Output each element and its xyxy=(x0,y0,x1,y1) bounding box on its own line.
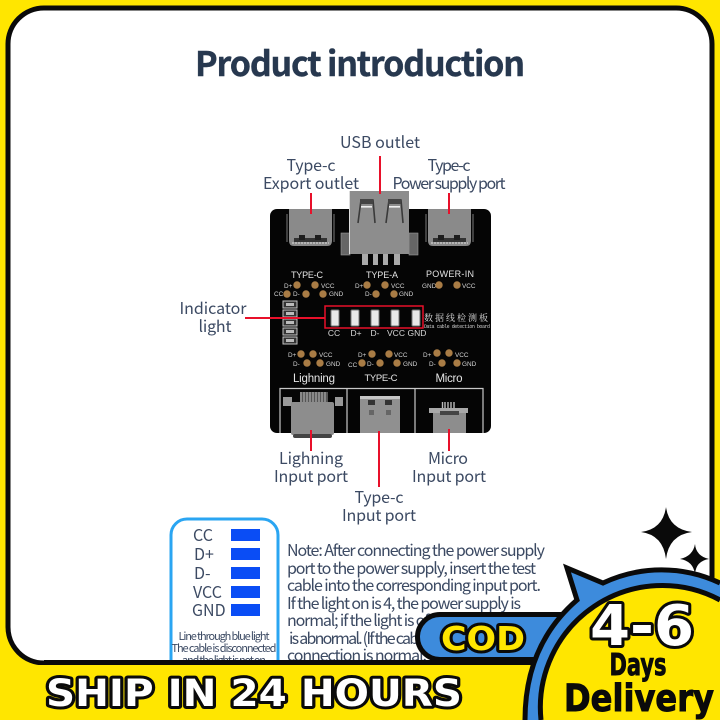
yellow strip beside badge xyxy=(712,585,720,720)
board labels bottom pads: GND xyxy=(462,361,477,368)
board labels bottom pads: D- xyxy=(367,361,374,368)
indicator LEDs: GND xyxy=(408,328,426,338)
board labels bottom: Micro xyxy=(436,373,462,385)
board labels bottom: TYPE-C xyxy=(364,373,398,384)
board labels bottom pads: GND xyxy=(326,361,341,368)
board labels top: GND xyxy=(329,291,344,298)
port: type-c input xyxy=(360,396,400,433)
legend labels xyxy=(192,522,226,621)
badge ring outline xyxy=(525,568,720,720)
legend caption: and the light is not on xyxy=(182,652,266,668)
legend labels: GND xyxy=(192,597,226,621)
icon: sparkles xyxy=(641,507,709,574)
board labels bottom xyxy=(293,373,462,385)
board labels bottom pads: GND xyxy=(403,361,418,368)
label: lightning input port: Lighning xyxy=(279,445,343,469)
label: type-c power supply port xyxy=(392,152,506,194)
solder pads top xyxy=(283,281,461,298)
port: type-c power xyxy=(426,209,473,246)
label: micro input port xyxy=(412,445,486,487)
label: indicator light: light xyxy=(198,313,232,337)
label: micro input port: Input port xyxy=(412,463,486,487)
board name: 数据线检测板 xyxy=(424,311,490,324)
board labels top: TYPE-C xyxy=(291,270,324,280)
badge disc outline xyxy=(540,586,720,720)
board labels bottom pads: D+ xyxy=(358,352,367,359)
board labels top: D- xyxy=(365,291,372,298)
board labels bottom pads: D- xyxy=(293,361,300,368)
board labels top: D- xyxy=(293,291,300,298)
port: lightning xyxy=(283,392,343,438)
port: USB side tabs xyxy=(341,233,418,255)
label: type-c input port: Input port xyxy=(342,502,416,526)
badge yellow disc xyxy=(540,586,720,720)
board labels bottom pads: CC xyxy=(348,362,358,369)
board labels bottom pads: VCC xyxy=(319,352,333,359)
board name: Data cable detection board xyxy=(424,324,490,330)
label: type-c input port: Type-c xyxy=(354,484,404,508)
port: USB type-A xyxy=(349,191,409,265)
board labels top: VCC xyxy=(391,283,405,290)
product board xyxy=(270,191,491,438)
label: lightning input port: Input port xyxy=(274,463,348,487)
label: type-c export outlet: Type-c xyxy=(286,152,336,176)
label: micro input port: Micro xyxy=(428,445,468,469)
note text: cable into the corresponding input port. xyxy=(287,572,541,596)
board labels bottom: Lighning xyxy=(293,373,335,385)
callout lines xyxy=(245,156,449,487)
legend blue lights xyxy=(231,529,260,616)
label: USB outlet: USB outlet xyxy=(340,129,420,153)
legend caption: The cable is disconnected xyxy=(172,640,276,656)
note text xyxy=(287,537,546,666)
label: type-c export outlet xyxy=(263,152,359,194)
board labels top: TYPE-A xyxy=(366,270,398,280)
note text: Note: After connecting the power supply xyxy=(287,537,546,561)
label: indicator light: Indicator xyxy=(180,295,247,319)
indicator LEDs: D+ xyxy=(350,328,362,338)
board labels bottom pads: VCC xyxy=(455,352,469,359)
label: type-c power supply port: Type-c xyxy=(428,152,470,176)
board labels top: GND xyxy=(399,291,414,298)
note text: connection is normal. xyxy=(287,642,427,666)
board labels top: VCC xyxy=(321,283,335,290)
legend labels: D- xyxy=(194,560,211,584)
label: type-c input port xyxy=(342,484,416,526)
board labels bottom pads: D+ xyxy=(288,352,297,359)
label: type-c power supply port: Power supply port xyxy=(392,170,506,194)
board labels top: GND xyxy=(422,283,437,290)
badge blue ring xyxy=(525,568,720,720)
bottom yellow band xyxy=(0,665,540,720)
board labels bottom pads: D+ xyxy=(423,352,432,359)
label: type-c export outlet: Export outlet xyxy=(263,170,359,194)
delivery badge xyxy=(525,568,720,720)
indicator LEDs: VCC xyxy=(387,328,405,338)
label: lightning input port xyxy=(274,445,348,487)
panel: light legend xyxy=(171,519,278,668)
board labels bottom pads: VCC xyxy=(394,352,408,359)
days: Days xyxy=(610,648,666,683)
board labels top: VCC xyxy=(462,283,476,290)
note text: If the light on is 4, the power supply is xyxy=(287,590,521,614)
COD pill: COD xyxy=(441,619,525,658)
indicator LEDs: D- xyxy=(371,328,380,338)
resistor column xyxy=(283,301,297,344)
board labels top: D+ xyxy=(284,283,293,290)
title: Product introduction xyxy=(195,37,525,86)
legend labels: CC xyxy=(193,522,213,546)
note text: normal; if the light is off, xyxy=(287,607,437,631)
board labels top: D+ xyxy=(355,283,364,290)
note text: is abnormal. (If the cable xyxy=(289,625,429,649)
legend labels: D+ xyxy=(194,541,214,565)
port: type-c export xyxy=(287,209,334,246)
board labels top: POWER-IN xyxy=(426,269,474,279)
indicator LEDs xyxy=(328,310,426,338)
4-6: 4-6 xyxy=(590,594,694,659)
indicator LEDs: CC xyxy=(328,328,340,338)
shipping text: SHIP IN 24 HOURS xyxy=(46,672,462,715)
port bay outlines xyxy=(280,388,483,433)
legend labels: VCC xyxy=(193,579,222,603)
board name xyxy=(424,311,490,330)
board labels bottom pads: D- xyxy=(429,361,436,368)
board labels bottom pads xyxy=(288,349,477,369)
board labels top: CC xyxy=(274,291,284,298)
note text: port to the power supply, insert the test xyxy=(287,555,536,579)
board labels top xyxy=(274,269,476,298)
port: micro input xyxy=(429,402,468,433)
legend caption: Line through blue light xyxy=(178,628,270,644)
indicator highlight box xyxy=(325,306,423,328)
legend caption xyxy=(172,628,276,668)
COD pill xyxy=(418,614,566,660)
label: indicator light xyxy=(180,295,247,337)
